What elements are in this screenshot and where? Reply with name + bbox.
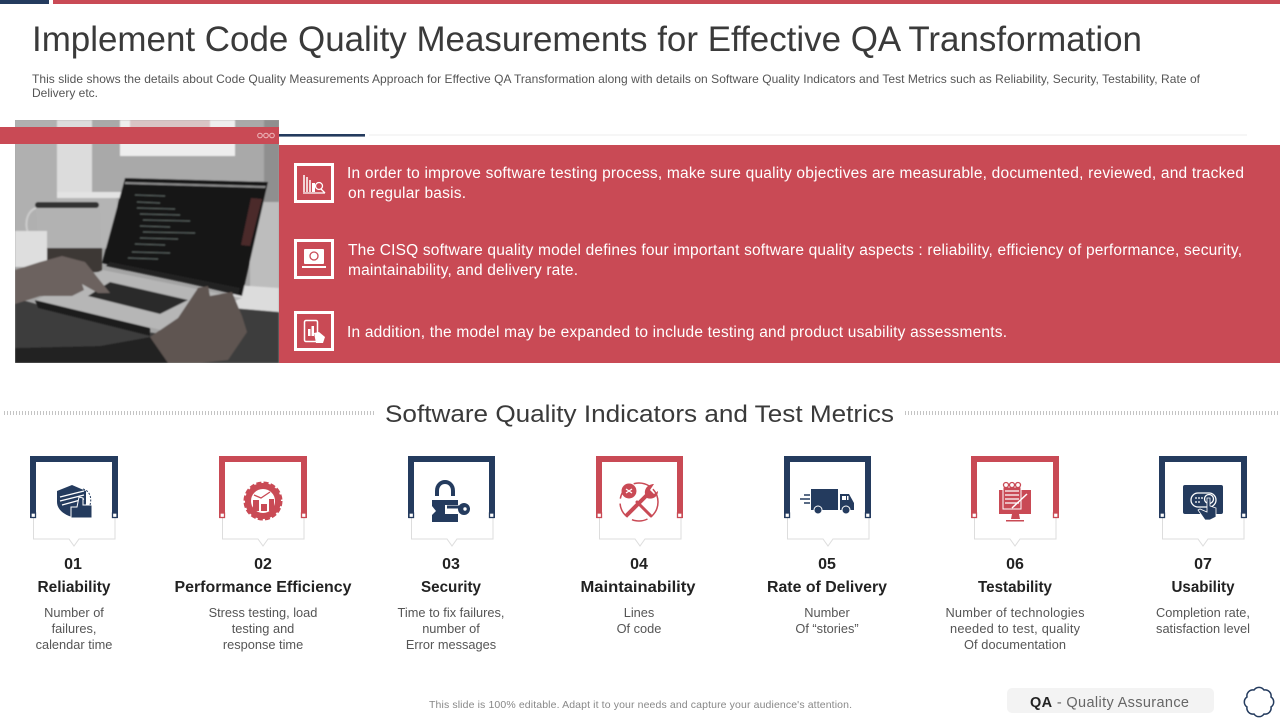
label text: Performance Efficiency bbox=[174, 579, 352, 596]
red band over photo bbox=[0, 127, 279, 144]
metric 03: Security bbox=[398, 456, 504, 652]
laptop screen with code bbox=[102, 178, 268, 296]
metric 06: Testability bbox=[946, 456, 1084, 652]
text: objectives: In order to improve software testing process, make sure quality objectives are measurable, documented, reviewed, and tracked bbox=[347, 165, 1244, 182]
label text bbox=[174, 556, 352, 652]
top accent bar bbox=[0, 0, 1280, 4]
label text: Testability bbox=[978, 579, 1052, 596]
abbreviation badge: QA - Quality Assurance bbox=[1030, 695, 1189, 711]
icon frame bbox=[219, 456, 307, 546]
label text: Of code bbox=[617, 621, 661, 636]
label text: number of bbox=[422, 621, 480, 636]
label text: calendar time bbox=[36, 637, 112, 652]
label text bbox=[1156, 556, 1250, 636]
laptop base bbox=[35, 270, 242, 336]
right hand bbox=[150, 286, 247, 363]
icon: chart and magnifier bbox=[296, 164, 332, 202]
label text: 06 bbox=[1006, 556, 1024, 573]
icon: crossed wrench and screwdriver bbox=[620, 483, 658, 521]
label text bbox=[398, 556, 504, 652]
icon frame bbox=[971, 456, 1059, 546]
icon: shield and thumbs up bbox=[57, 485, 92, 518]
label text: 02 bbox=[254, 556, 272, 573]
photo: hands typing on laptop bbox=[15, 120, 279, 363]
label text: Number of bbox=[44, 605, 104, 620]
text: objectives bbox=[347, 165, 1244, 202]
label text: Maintainability bbox=[580, 579, 696, 596]
metric 04: Maintainability bbox=[580, 456, 696, 636]
text: objectives: on regular basis. bbox=[348, 185, 466, 202]
label text bbox=[36, 556, 112, 652]
label text: 01 bbox=[64, 556, 82, 573]
icon: tablet with touch bbox=[1183, 485, 1223, 520]
label text: Of documentation bbox=[964, 637, 1066, 652]
desk and felt mat bbox=[15, 285, 279, 363]
label text bbox=[946, 556, 1084, 652]
icon frame bbox=[408, 456, 495, 546]
label text: Reliability bbox=[38, 579, 111, 596]
label text: Number of technologies bbox=[946, 605, 1084, 620]
mug bbox=[15, 231, 47, 267]
text: CISQ model: maintainability, and delivery rate. bbox=[348, 262, 578, 279]
icon frame bbox=[1159, 456, 1247, 546]
icon: notepad on monitor bbox=[999, 482, 1031, 522]
label text: 03 bbox=[442, 556, 460, 573]
label text: satisfaction level bbox=[1156, 621, 1250, 636]
icon: gear with chart bbox=[245, 483, 281, 519]
label text: Security bbox=[421, 579, 481, 596]
icon: delivery truck bbox=[800, 489, 854, 514]
abbreviation badge bbox=[1007, 688, 1214, 713]
icon: scalloped badge bbox=[1244, 687, 1274, 717]
subtitle: This slide shows the details about Code Quality Measurements Approach for Effective QA Transformation along with details on Software Quality Indicators and Test Metrics such as Reliability, Security, Testability, Rate of bbox=[32, 72, 1201, 86]
label text: Error messages bbox=[406, 637, 496, 652]
metric 02: Performance Efficiency bbox=[174, 456, 352, 652]
sleeve bbox=[15, 337, 168, 363]
label text bbox=[767, 556, 887, 636]
text: usability: In addition, the model may be expanded to include testing and product usability assessments. bbox=[347, 324, 1007, 341]
icon: tablet and hand bbox=[296, 312, 332, 350]
icon frame bbox=[784, 456, 871, 546]
metric 07: Usability bbox=[1156, 456, 1250, 636]
left hand bbox=[15, 256, 110, 304]
subtitle: Delivery etc. bbox=[32, 86, 98, 100]
label text: Lines bbox=[624, 605, 654, 620]
label text: 04 bbox=[630, 556, 648, 573]
label text: 05 bbox=[818, 556, 836, 573]
label text: testing and bbox=[232, 621, 294, 636]
label text: needed to test, quality bbox=[950, 621, 1081, 636]
glass jug bbox=[26, 202, 102, 272]
title: Implement Code Quality Measurements for Effective QA Transformation bbox=[32, 20, 1142, 59]
subtitle bbox=[32, 72, 1201, 100]
metric 05: Rate of Delivery bbox=[767, 456, 887, 636]
icon: laptop with gear bbox=[296, 240, 332, 278]
label text: Of “stories” bbox=[795, 621, 859, 636]
label text: Number bbox=[804, 605, 850, 620]
section heading: Software Quality Indicators and Test Metrics bbox=[385, 401, 894, 428]
label text: Time to fix failures, bbox=[398, 605, 504, 620]
text: CISQ model: The CISQ software quality model defines four important software quality aspects : reliability, efficiency of performance, security, bbox=[348, 242, 1242, 259]
label text: Stress testing, load bbox=[209, 605, 317, 620]
footer note: This slide is 100% editable. Adapt it to your needs and capture your audience's attention. bbox=[429, 699, 852, 711]
label text: failures, bbox=[52, 621, 96, 636]
text: CISQ model bbox=[348, 242, 1242, 279]
metric 01: Reliability bbox=[30, 456, 118, 652]
icon frame bbox=[30, 456, 118, 546]
icon: padlock and key bbox=[432, 482, 470, 522]
label text bbox=[580, 556, 696, 636]
label text: 07 bbox=[1194, 556, 1212, 573]
panel: red objectives bbox=[279, 145, 1280, 363]
label text: Completion rate, bbox=[1156, 605, 1250, 620]
icon frame bbox=[596, 456, 683, 546]
label text: Usability bbox=[1172, 579, 1235, 596]
label text: response time bbox=[223, 637, 303, 652]
label text: Rate of Delivery bbox=[767, 579, 887, 596]
